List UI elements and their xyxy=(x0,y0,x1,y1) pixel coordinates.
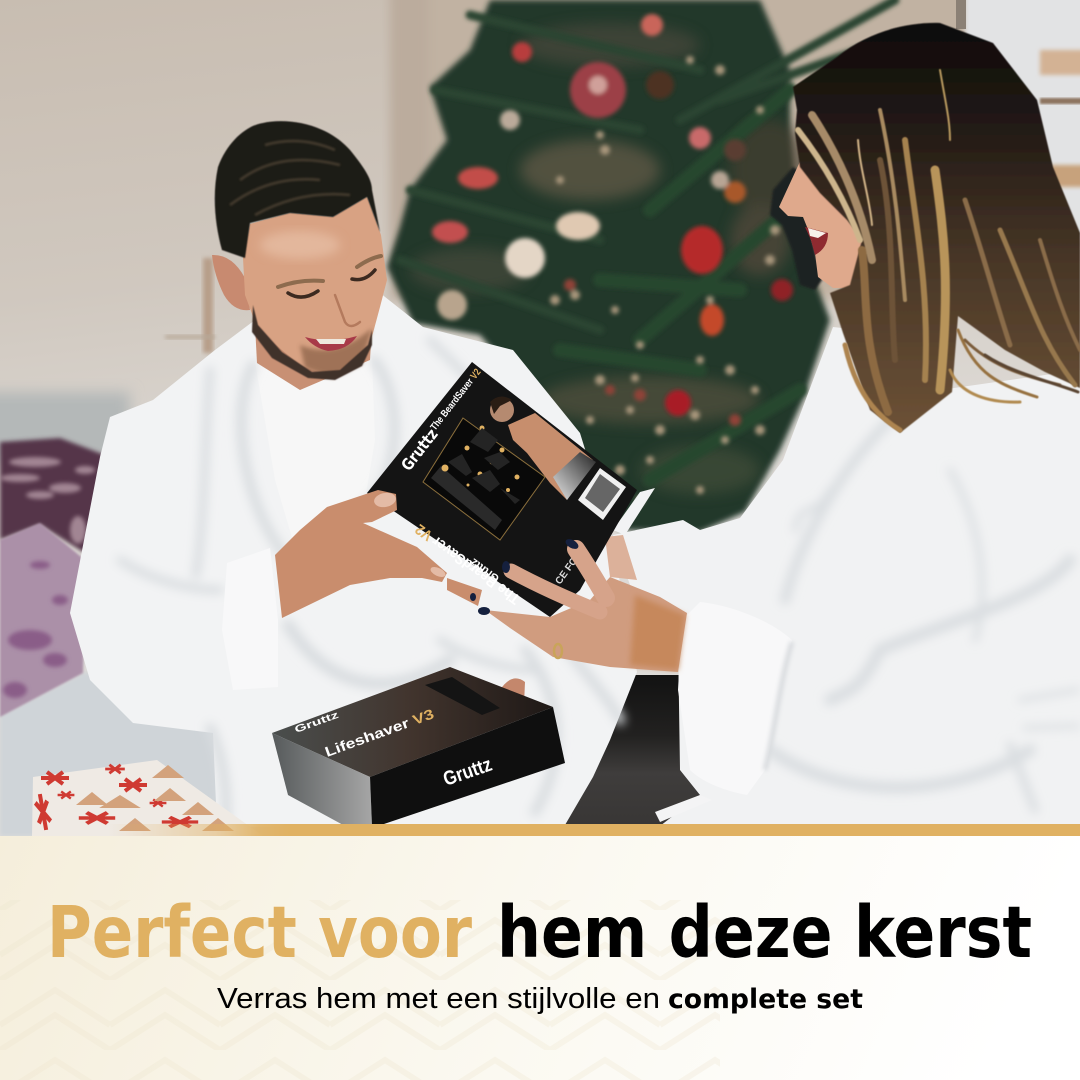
man: robe shading xyxy=(120,340,620,826)
woman: dark backing behind face xyxy=(770,167,822,290)
man: hair xyxy=(215,121,380,258)
tree mass xyxy=(387,0,830,532)
razor on top face xyxy=(425,677,500,715)
woman: arm shading xyxy=(630,595,685,670)
subheading: Verras hem met een stijlvolle en xyxy=(217,983,660,1015)
man: ear xyxy=(212,255,250,310)
box: The BeardSaver V2 xyxy=(367,362,637,617)
man: sleeve cuff xyxy=(222,548,278,690)
lilac pillow xyxy=(0,523,85,717)
woman: palm and arm xyxy=(485,577,687,672)
box labels: Gruttz xyxy=(440,754,495,791)
box titles xyxy=(397,367,523,608)
compliance marks: CE FC xyxy=(554,556,580,587)
man: t-shirt xyxy=(255,358,375,565)
top face xyxy=(272,667,553,777)
thumb behind box xyxy=(500,678,525,705)
printed model head xyxy=(490,396,514,422)
woman: hand over box xyxy=(470,537,687,672)
woman xyxy=(605,23,1080,826)
woman: cuff shadow xyxy=(765,642,792,770)
woman: face xyxy=(779,162,862,288)
gift box xyxy=(32,760,263,836)
man: thumb nail xyxy=(373,491,397,509)
box face xyxy=(367,362,637,617)
woman: cuff xyxy=(678,676,768,760)
headline xyxy=(47,891,1032,974)
box titles: The BeardSaver V2 xyxy=(429,367,484,433)
woman: nails xyxy=(470,537,580,615)
tree ornaments and lights xyxy=(432,14,793,504)
man: chin stubble xyxy=(300,328,372,378)
bottom panel xyxy=(0,836,1080,1080)
woman: bathrobe xyxy=(613,327,1080,826)
man: eyes and brows xyxy=(278,256,381,326)
man: palm and fingers xyxy=(275,490,447,618)
tree warm tones xyxy=(410,23,810,494)
printed sleeve xyxy=(553,452,596,500)
man: neck xyxy=(256,336,371,390)
barcode bars xyxy=(585,474,620,512)
man: face xyxy=(243,197,387,378)
box labels: Gruttz xyxy=(293,710,340,736)
man: bathrobe xyxy=(70,293,637,827)
man: beard line xyxy=(252,305,372,380)
christmas tree xyxy=(387,0,895,532)
front face xyxy=(370,707,565,826)
woman: robe tag near box xyxy=(613,488,655,535)
box: Lifeshaver V3 xyxy=(272,667,565,826)
woman: robe folds xyxy=(770,420,1078,810)
woman: teeth xyxy=(808,228,826,238)
product tray xyxy=(423,418,545,540)
woman: second wrist xyxy=(605,535,637,580)
woman: hair highlights xyxy=(798,70,1080,430)
left face xyxy=(272,733,372,826)
bed sheet xyxy=(0,674,216,836)
dark pillow xyxy=(0,438,105,555)
subheading: complete set xyxy=(668,984,863,1015)
trimmer xyxy=(431,466,502,530)
man xyxy=(70,121,637,827)
man: hand over box xyxy=(222,490,447,690)
woman: index finger xyxy=(511,571,600,612)
man: fingertips under box xyxy=(447,578,482,606)
woman: chest skin xyxy=(882,340,898,380)
woman: hair xyxy=(793,23,1080,433)
man: face highlight xyxy=(260,231,340,259)
background wall xyxy=(0,0,1080,836)
photo scene xyxy=(0,0,1080,836)
man: mouth xyxy=(305,336,357,351)
box titles: The BeardSaver V2 xyxy=(412,520,523,608)
barcode xyxy=(578,468,626,520)
woman: belt end xyxy=(655,795,700,822)
woman: mouth xyxy=(805,227,828,255)
man: finger nail xyxy=(429,565,447,579)
man: teeth xyxy=(316,339,346,344)
box titles: Gruttz xyxy=(397,425,442,474)
box titles: Gruttz xyxy=(468,555,502,584)
woman: thumb xyxy=(576,549,606,598)
box labels: Lifeshaver V3 xyxy=(323,705,436,760)
pillows and bed xyxy=(0,438,240,836)
printed model torso xyxy=(508,413,593,500)
headline: Perfect voor xyxy=(47,891,472,974)
gold bar xyxy=(0,824,1080,836)
subheading xyxy=(217,983,863,1015)
box labels xyxy=(293,705,495,791)
woman: ring xyxy=(554,644,562,658)
tree branches xyxy=(400,0,895,480)
dark blanket xyxy=(566,675,700,824)
